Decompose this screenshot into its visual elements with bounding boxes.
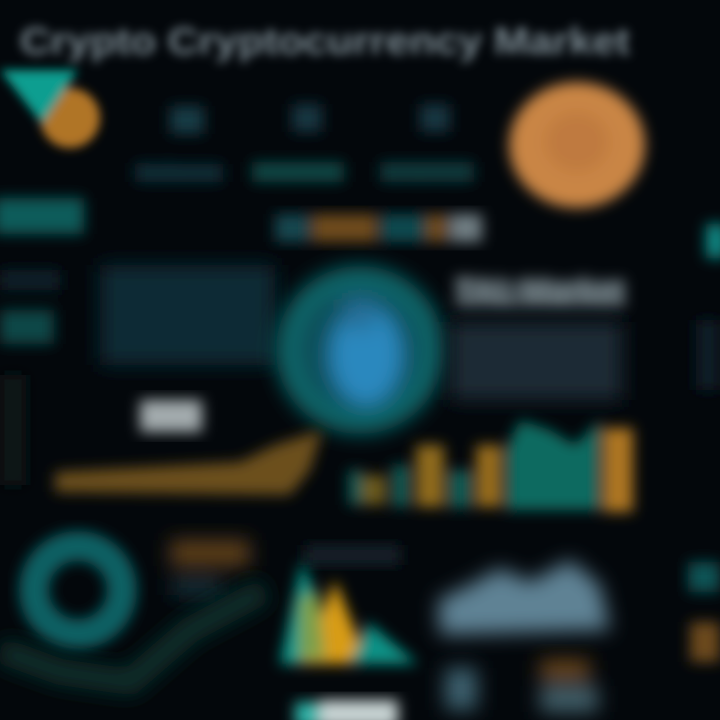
label above triangle chart <box>305 545 400 565</box>
bottom icons <box>445 660 598 712</box>
orange area chart <box>55 430 322 495</box>
stat: item three <box>380 104 474 188</box>
subheading row <box>275 214 482 242</box>
panel: dark teal chart <box>100 265 275 365</box>
stat: item one: Volume <box>135 157 223 188</box>
globe icon <box>276 266 444 434</box>
panel: slate text block <box>450 322 622 400</box>
bar chart <box>348 420 633 512</box>
heading right: TAL Market <box>455 271 625 313</box>
dark teal line chart <box>0 590 265 682</box>
icon: teal triangle and orange circle <box>0 70 100 148</box>
stat: item three: Growth <box>380 157 474 188</box>
mountain chart <box>280 560 418 664</box>
bottom white-teal label <box>295 700 398 720</box>
white figure label <box>140 400 202 432</box>
stat: item two: Market <box>252 157 344 188</box>
donut chart <box>34 546 122 634</box>
stat: item two <box>252 104 344 188</box>
stat: item one <box>135 106 223 188</box>
title: Crypto Cryptocurrency Market <box>20 21 630 63</box>
icon: large orange coin <box>509 82 645 208</box>
orange label <box>170 540 250 596</box>
left teal text block <box>0 198 84 485</box>
slate area chart <box>438 560 610 635</box>
right edge fragments <box>688 224 720 662</box>
